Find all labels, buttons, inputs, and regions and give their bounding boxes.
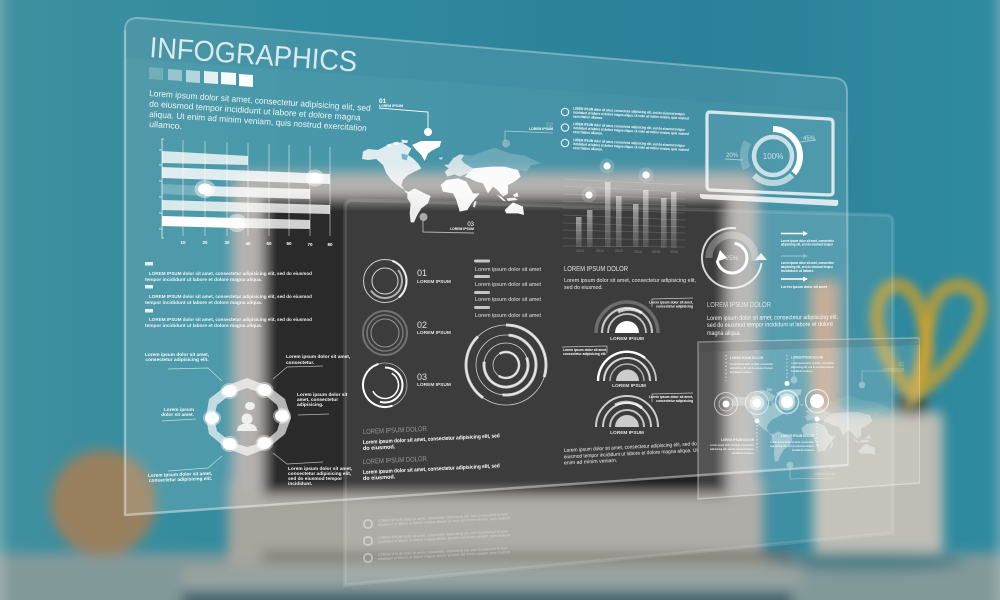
left text list: tempor incididunt ut labore et dolore magna aliqua. xyxy=(145,323,262,329)
arrows with notes: adipisicing elit, sed do eiusmod tempor xyxy=(781,242,834,246)
right heading block: LOREM IPSUM DOLOR xyxy=(564,266,628,273)
laptop donut icon xyxy=(700,112,838,206)
panel: front small glass sheet: LOREM IPSUM xyxy=(814,472,835,476)
column chart: 2010 xyxy=(576,249,584,253)
icon: person with speech bubble xyxy=(237,402,257,431)
bullet list top right: incididunt ut labore et dolore magna aliqua. Ut enim ad minim veniam, quis nostrud xyxy=(573,111,689,121)
numbered ring group: 02 xyxy=(417,320,427,330)
half-ring charts: LOREM IPSUM xyxy=(612,383,646,389)
panel: front small glass sheet: LOREM IPSUM DOLOR xyxy=(791,356,823,360)
column chart xyxy=(563,158,685,254)
horizontal bar chart: 60 xyxy=(286,241,292,246)
intro paragraph: aliqua. Ut enim ad minim veniam, quis nostrud exercitation xyxy=(149,109,367,133)
bottom left text block: Lorem ipsum dolor sit amet, consectetur adipisicing elit, sed xyxy=(363,463,500,476)
half-ring charts: Lorem ipsum dolor sit amet, xyxy=(649,395,693,399)
bullet list top right: exercitation ullamco. xyxy=(573,146,603,152)
half-ring charts: consectetur adipisicing elit. xyxy=(563,352,607,356)
horizontal bar chart: 50 xyxy=(266,241,272,246)
ring diagram with person: dolor sit amet. xyxy=(161,412,194,418)
ring diagram with person: consectetur adipisicing elit, xyxy=(288,471,352,477)
ring diagram with person: consectetur adipisicing elit. xyxy=(149,476,212,484)
laptop donut icon: 100% xyxy=(763,152,783,161)
map callouts: LOREM IPSUM xyxy=(379,104,403,108)
bullet list top right: incididunt ut labore et dolore magna aliqua. Ut enim ad minim veniam, quis nostrud xyxy=(573,126,689,136)
right heading block: sed do eiusmod. xyxy=(564,285,603,291)
panel: front small glass sheet: Lorem ipsum dolor sit amet, consectetur xyxy=(730,362,774,366)
ghost list reflection xyxy=(364,520,372,562)
half-ring charts: consectetur adipisicing xyxy=(656,304,693,308)
small bars with text: Lorem ipsum dolor sit amet xyxy=(475,297,541,303)
bottom right paragraph: eiusmod tempor incididunt ut labore et dolore magna aliqua. Ut xyxy=(564,448,698,460)
ring diagram with person: incididunt. xyxy=(288,481,312,487)
panel: front small glass sheet: Lorem ipsum dolor sit amet, consectetur xyxy=(770,440,815,444)
panel: main glass sheet xyxy=(125,18,848,515)
ghost list text: LOREM IPSUM dolor sit amet, consectetur adipisicing elit, sed do eiusmod tempor xyxy=(378,529,509,540)
ring diagram with person: Lorem ipsum xyxy=(164,407,194,413)
ghost list text: LOREM IPSUM dolor sit amet, consectetur adipisicing elit, sed do eiusmod tempor xyxy=(378,546,509,557)
ring diagram with person: amet, consectetur xyxy=(297,397,338,403)
bottom right paragraph: enim ad minim veniam. xyxy=(564,458,617,466)
gauge caption: Lorem ipsum dolor sit amet, consectetur adipisicing elit, xyxy=(707,314,838,322)
numbered ring group xyxy=(357,253,451,413)
intro paragraph: do eiusmod tempor incididunt ut labore et dolore magna xyxy=(149,99,361,123)
circular 25% gauge: 25% xyxy=(725,255,739,262)
half-ring charts: Lorem ipsum dolor sit amet, xyxy=(649,300,693,304)
small bars with text: Lorem ipsum dolor sit amet xyxy=(475,282,541,288)
horizontal bar chart xyxy=(159,139,333,247)
arrows with notes: incididunt ut labore. xyxy=(781,269,814,273)
bullet list top right: LOREM IPSUM dolor sit amet, consectetur adipisicing elit, sed do eiusmod tempor xyxy=(573,107,685,116)
bottom right paragraph: Lorem ipsum dolor sit amet, consectetur adipiscing elit, sed do xyxy=(564,441,697,454)
panel: front small glass sheet: 02 xyxy=(898,362,904,368)
ring diagram with person: Lorem ipsum dolor sit amet, xyxy=(148,471,213,479)
circular 25% gauge xyxy=(697,223,767,293)
left text list: LOREM IPSUM dolor sit amet, consectetur adipisicing elit, sed do eiusmod xyxy=(149,271,312,277)
arrows with notes xyxy=(781,231,834,289)
ghost list text xyxy=(378,512,510,561)
left text list: LOREM IPSUM dolor sit amet, consectetur adipisicing elit, sed do eiusmod xyxy=(149,294,312,300)
column chart: 2012 xyxy=(596,249,604,253)
panel: front small glass sheet: incididunt ut labore. xyxy=(732,451,754,455)
arrows with notes: Lorem ipsum dolor sit amet, consectetur xyxy=(781,261,834,265)
horizontal bar chart: 40 xyxy=(245,241,251,246)
gauge caption: sed do eiusmod tempor incididunt ut labore et dolore xyxy=(707,321,833,329)
left text list: tempor incididunt ut labore et dolore magna aliqua. xyxy=(145,300,262,306)
horizontal bar chart: 10 xyxy=(180,240,186,245)
bottom right paragraph xyxy=(564,441,698,466)
column chart: 2016 xyxy=(670,250,678,254)
half-ring charts: consectetur adipisicing xyxy=(656,399,693,403)
ghost list text: incididunt ut labore et dolore magna aliqua. Ut enim ad minim veniam, quis nostrud xyxy=(378,533,510,544)
ring diagram with person: consectetur adipisicing elit. xyxy=(145,357,209,363)
panel: front small glass sheet: LOREM IPSUM xyxy=(883,367,904,371)
panel: front small glass sheet: incididunt ut labore. xyxy=(791,369,813,373)
half-ring charts xyxy=(562,298,693,436)
ring diagram with person: Lorem ipsum dolor sit amet, xyxy=(286,354,351,360)
map callouts: 01 xyxy=(379,98,387,105)
map callouts xyxy=(379,98,554,233)
bullet list top right: exercitation ullamco. xyxy=(573,130,603,136)
map callouts: LOREM IPSUM xyxy=(450,227,474,231)
column chart: 2015 xyxy=(652,250,660,254)
panel: front small glass sheet: 03 xyxy=(829,465,835,471)
intro paragraph: Lorem ipsum dolor sit amet, consectetur adipisicing elit, sed xyxy=(149,88,371,113)
small bars with text: Lorem ipsum dolor sit amet xyxy=(475,313,541,319)
bottom left text block: Lorem ipsum dolor sit amet, consectetur adipisicing elit, sed xyxy=(363,433,500,446)
large concentric rings xyxy=(450,309,562,421)
panel: front small glass sheet: adipisicing elit, sed do eiusmod tempor xyxy=(770,444,815,448)
gauge caption xyxy=(707,300,838,337)
panel: front small glass sheet: incididunt ut labore. xyxy=(730,370,752,374)
map callouts: 03 xyxy=(467,222,475,228)
ring diagram with person: sed do eiusmod tempor xyxy=(288,476,342,482)
intro paragraph xyxy=(149,88,371,133)
ring diagram with person: consectetur. xyxy=(286,360,314,366)
arrows with notes: Lorem ipsum dolor sit amet. xyxy=(781,285,828,289)
panel: front small glass sheet: Lorem ipsum dolor sit amet, consectetur xyxy=(791,361,835,365)
panel: front small glass sheet: LOREM IPSUM DOLOR xyxy=(730,356,763,360)
numbered ring group: LOREM IPSUM xyxy=(417,330,451,336)
arrows with notes: adipisicing elit, sed do eiusmod tempor xyxy=(781,265,834,269)
laptop donut icon: 45% xyxy=(803,136,816,142)
column chart: 2014 xyxy=(634,250,642,254)
laptop donut icon: 20% xyxy=(726,153,739,159)
bullet list top right: incididunt ut labore et dolore magna aliqua. Ut enim ad minim veniam, quis nostrud xyxy=(573,142,689,152)
arrows with notes: Lorem ipsum dolor sit amet, consectetur xyxy=(781,239,834,243)
ring diagram with person: Lorem ipsum dolor sit amet, xyxy=(288,466,353,472)
ring diagram with person: adipisicing. xyxy=(297,402,323,408)
panel: front small glass sheet: adipisicing elit, sed do eiusmod tempor xyxy=(730,366,774,370)
horizontal bar chart: 30 xyxy=(224,240,230,245)
intro paragraph: ullamco. xyxy=(149,119,182,131)
small bars with text xyxy=(474,260,541,319)
numbered ring group: LOREM IPSUM xyxy=(417,382,451,388)
colour swatches xyxy=(149,67,253,87)
panel: back glass sheet xyxy=(345,200,893,585)
panel: front small glass sheet: LOREM IPSUM DOLOR xyxy=(721,438,754,442)
horizontal bar chart: 20 xyxy=(202,240,208,245)
bullet list top right: LOREM IPSUM dolor sit amet, consectetur adipisicing elit, sed do eiusmod tempor xyxy=(573,122,685,132)
map callouts: 02 xyxy=(546,123,554,129)
half-ring charts: LOREM IPSUM xyxy=(610,430,644,436)
title: INFOGRAPHICS xyxy=(149,32,358,78)
panel: front small glass sheet xyxy=(698,338,920,499)
bottom left text block xyxy=(363,426,500,482)
horizontal bar chart: 70 xyxy=(307,242,313,247)
bottom left text block: LOREM IPSUM DOLOR xyxy=(363,426,427,436)
left text list: tempor incididunt ut labore et dolore magna aliqua. xyxy=(145,277,262,283)
bullet list top right: exercitation ullamco. xyxy=(573,115,603,120)
bullet list top right: LOREM IPSUM dolor sit amet, consectetur adipisicing elit, sed do eiusmod tempor xyxy=(573,138,685,148)
panel: front small glass sheet: LOREM IPSUM DOLOR xyxy=(781,434,814,438)
column chart: 2013 xyxy=(615,249,623,253)
numbered ring group: 03 xyxy=(417,372,427,382)
map callouts: LOREM IPSUM xyxy=(529,127,553,131)
ghost list text: LOREM IPSUM dolor sit amet, consectetur adipisicing elit, sed do eiusmod tempor xyxy=(378,512,509,523)
ring diagram with person: Lorem ipsum dolor sit xyxy=(297,392,348,398)
gauge caption: magna aliqua. xyxy=(707,330,741,337)
half-ring charts: LOREM IPSUM xyxy=(610,336,644,342)
left text list xyxy=(145,262,312,329)
numbered ring group: LOREM IPSUM xyxy=(417,279,451,285)
panel: front small glass sheet: adipisicing elit, sed do eiusmod tempor xyxy=(710,447,755,451)
ring diagram with person xyxy=(145,352,353,487)
horizontal bar chart: 80 xyxy=(327,242,333,247)
panel: front small glass sheet: adipisicing elit, sed do eiusmod tempor xyxy=(791,365,835,369)
panel: front small glass sheet: incididunt ut labore. xyxy=(792,448,814,452)
left text list: LOREM IPSUM dolor sit amet, consectetur adipisicing elit, sed do eiusmod xyxy=(149,317,312,323)
bottom left text block: LOREM IPSUM DOLOR xyxy=(363,456,427,466)
numbered ring group: 01 xyxy=(417,268,427,278)
world map xyxy=(362,140,541,222)
bottom left text block: do eiusmod. xyxy=(363,474,396,482)
ghost list text: incididunt ut labore et dolore magna aliqua. Ut enim ad minim veniam, quis nostrud xyxy=(378,550,510,561)
right heading block: Lorem ipsum dolor sit amet, consectetur adipisicing elit, xyxy=(564,278,696,284)
gauge caption: LOREM IPSUM DOLOR xyxy=(707,300,771,309)
bullet list top right xyxy=(561,107,689,152)
ring diagram with person: Lorem ipsum dolor sit amet, xyxy=(145,352,210,358)
right heading block xyxy=(564,266,696,291)
half-ring charts: Lorem ipsum dolor sit amet, xyxy=(563,348,607,352)
panel: front small glass sheet: Lorem ipsum dolor sit amet, consectetur xyxy=(710,443,755,447)
small bars with text: Lorem ipsum dolor sit amet xyxy=(475,267,541,273)
panel: front small glass sheet: 01 xyxy=(754,350,760,356)
bottom left text block: do eiusmod. xyxy=(363,444,396,452)
ghost list text: incididunt ut labore et dolore magna aliqua. Ut enim ad minim veniam, quis nostrud xyxy=(378,516,510,527)
